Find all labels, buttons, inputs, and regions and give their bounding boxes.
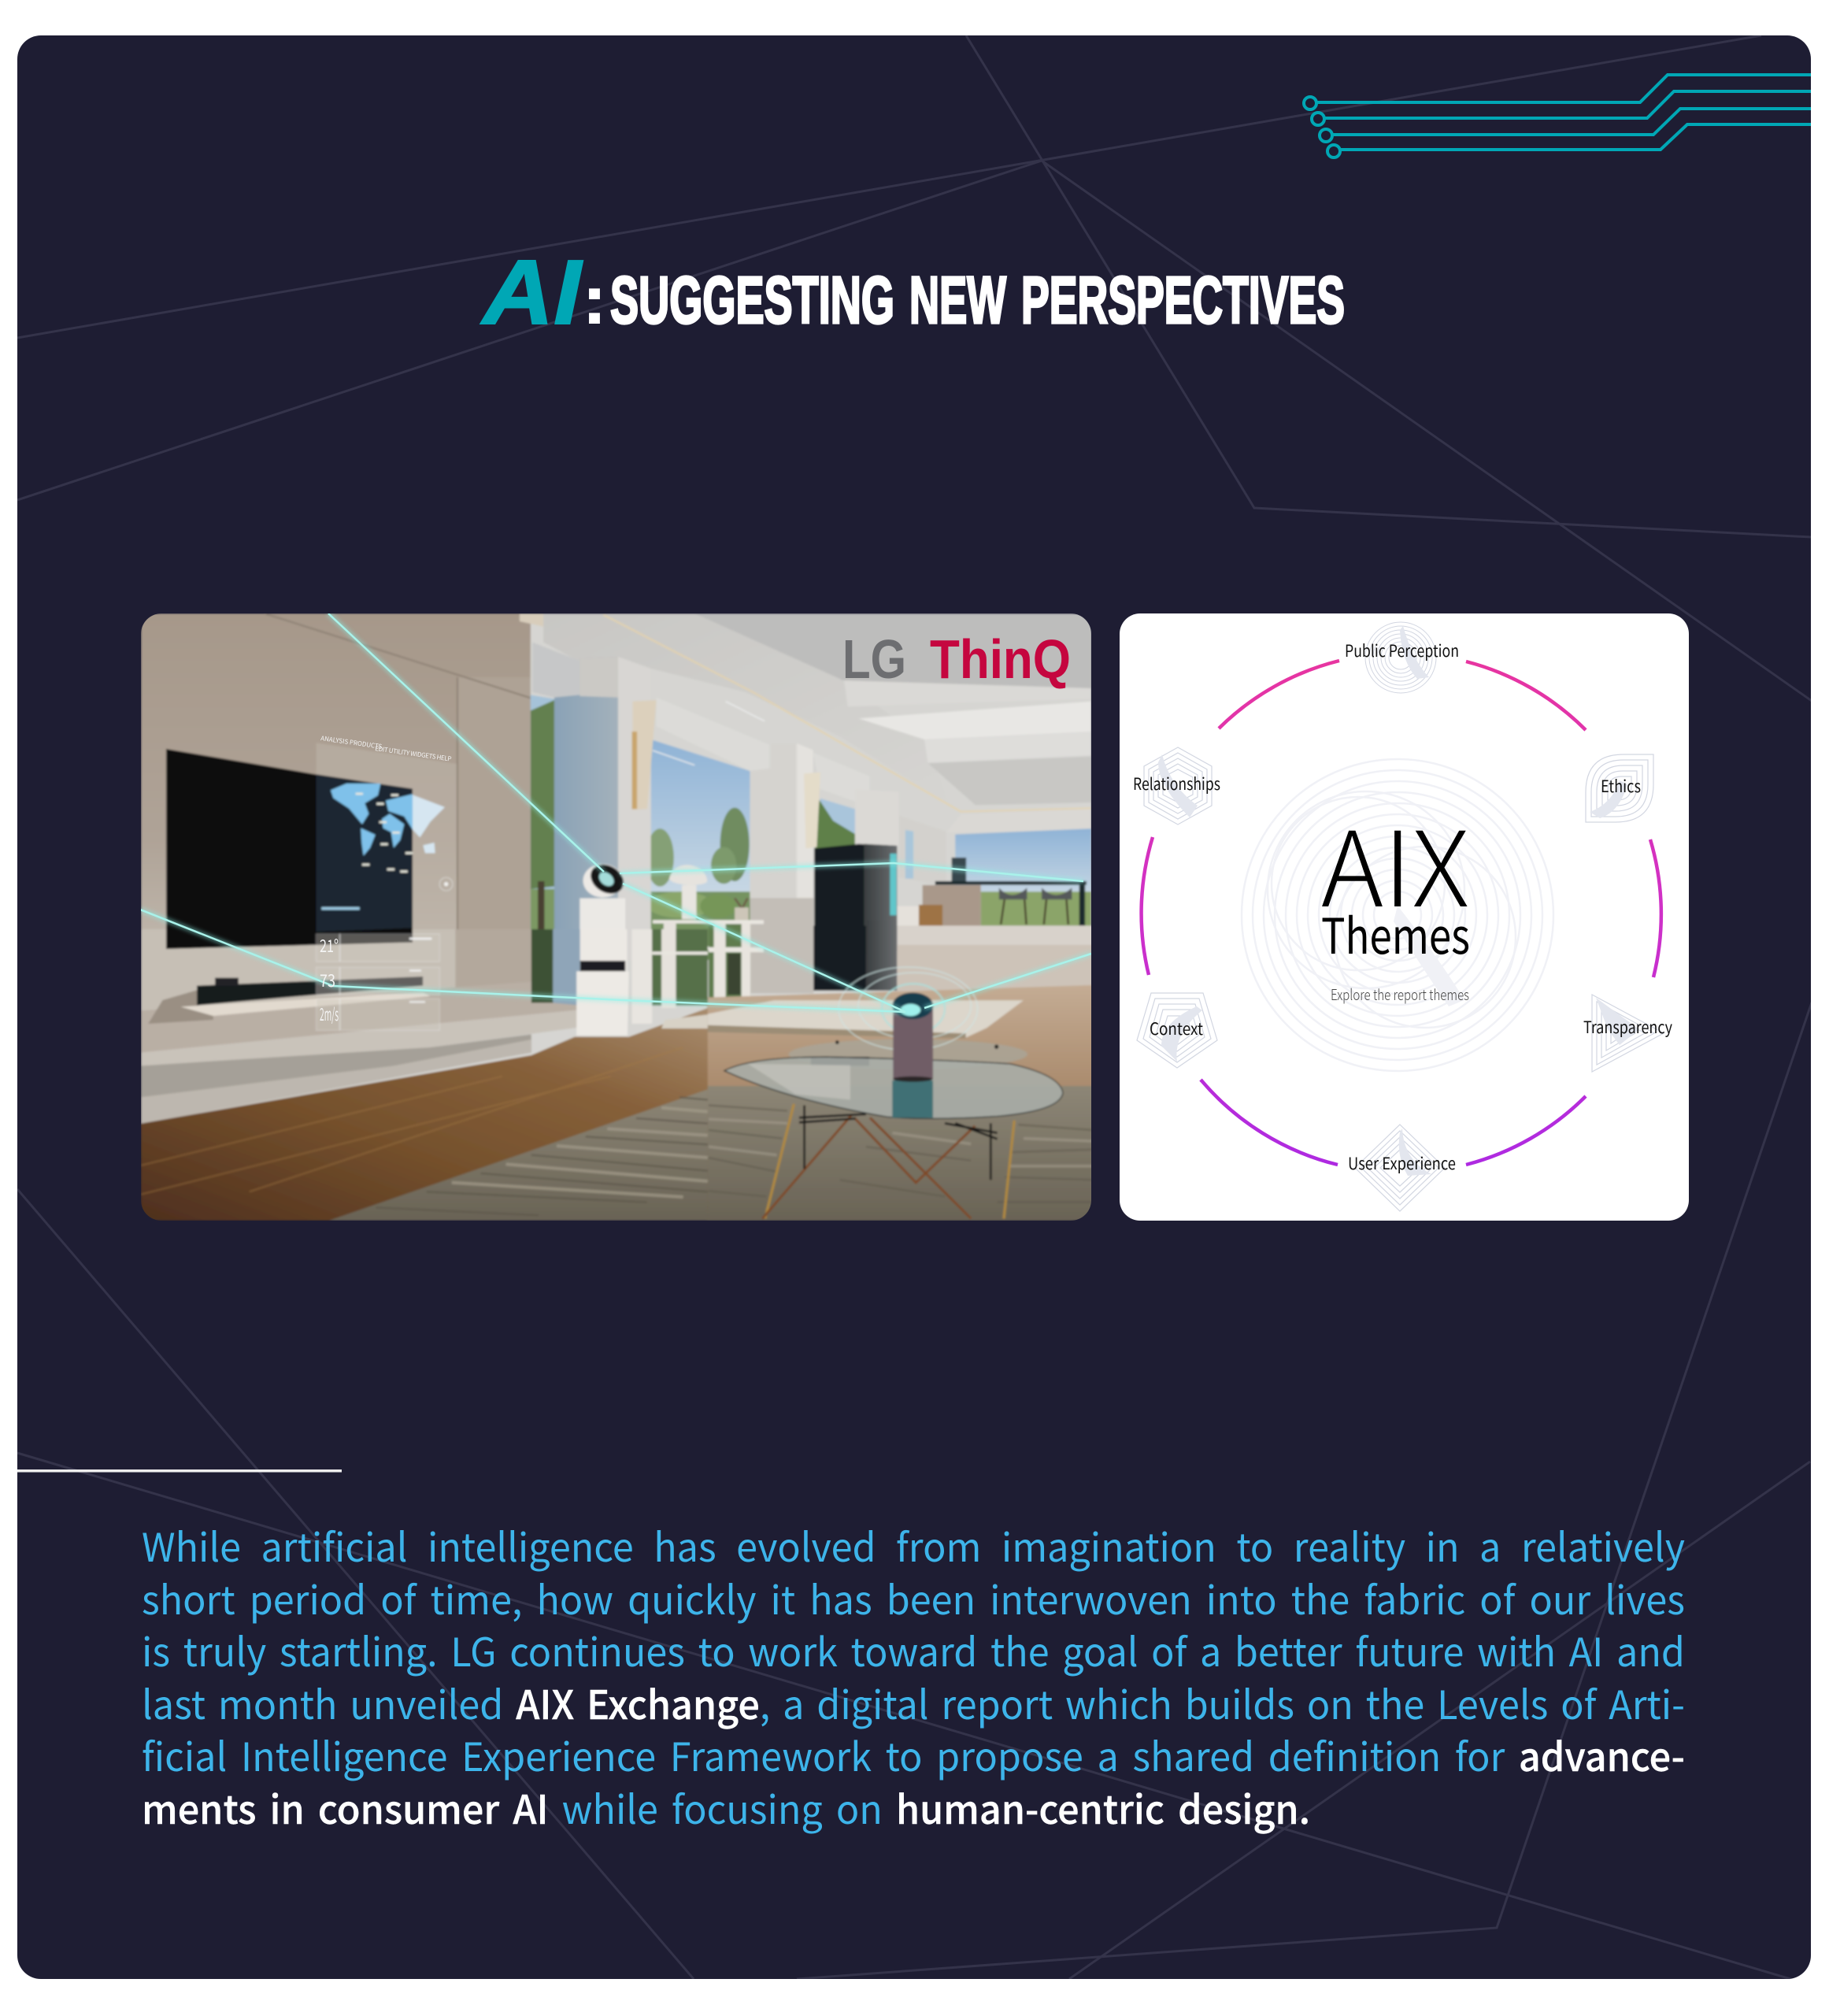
theme labels: Relationships — [1133, 772, 1220, 795]
photo: wall display readouts: 2m/s — [320, 1001, 339, 1026]
ring of arcs — [1142, 661, 1661, 1165]
interior: ceiling, columns and windows — [520, 613, 1092, 960]
icon: context pentagon — [1137, 993, 1217, 1068]
photo: wall display readouts: ANALYSIS PRODUCTS — [320, 734, 383, 751]
logo: LG ThinQ — [846, 638, 1069, 688]
icon: public perception circle — [1365, 622, 1436, 693]
icon: transparency triangle — [1592, 995, 1664, 1072]
photo: wall display readouts: 73 — [320, 967, 335, 992]
concentric rings — [1242, 759, 1553, 1071]
title: AI — [480, 241, 583, 343]
interior: left wall — [141, 613, 532, 931]
title: SUGGESTING — [610, 263, 894, 337]
body paragraph — [142, 1517, 1685, 1836]
body paragraph: While artificial intelligence has evolved from imagination to reality in a relatively — [142, 1517, 1685, 1573]
theme labels: User Experience — [1348, 1151, 1456, 1175]
title — [480, 241, 1345, 343]
theme labels: Public Perception — [1345, 639, 1459, 662]
title: PERSPECTIVES — [1021, 263, 1345, 337]
logo: LG ThinQ: ThinQ — [930, 628, 1071, 690]
photo: wall display readouts — [320, 734, 452, 1026]
icon: ethics leaf — [1586, 754, 1653, 822]
theme labels: Transparency — [1583, 1015, 1672, 1039]
interior: TV and holographic map — [166, 743, 457, 1030]
body paragraph: ficial Intelligence Experience Framework to propose a shared definition for advance- — [142, 1726, 1685, 1783]
body paragraph: is truly startling. LG continues to work toward the goal of a better future with AI and — [142, 1621, 1685, 1678]
heading: Themes: Themes — [1321, 897, 1470, 968]
theme labels — [1133, 639, 1672, 1175]
body paragraph: ments in consumer AI while focusing on human-centric design. — [142, 1779, 1310, 1836]
interior: right lower room and coffee table — [707, 898, 1094, 1221]
icon: relationships hexagon — [1144, 747, 1212, 825]
title: NEW — [909, 263, 1006, 337]
interior: console, floor and rug on the left — [141, 929, 708, 1221]
photo: wall display readouts: 21° — [320, 932, 339, 958]
caption: explore the report themes: Explore the report themes — [1331, 984, 1469, 1005]
photo: LG ThinQ smart living room — [140, 613, 1094, 1221]
panel: AIX Themes diagram — [1120, 613, 1689, 1221]
icon: circuit traces — [1304, 75, 1811, 158]
body paragraph: short period of time, how quickly it has been interwoven into the fabric of our lives — [142, 1569, 1685, 1626]
theme labels: Ethics — [1601, 774, 1641, 798]
photo: wall display readouts: EDIT UTILITY WIDGETS HELP — [375, 744, 452, 764]
logo: LG ThinQ: LG — [842, 628, 906, 690]
heading: AIX: AIX — [1321, 787, 1469, 937]
icon: user experience diamond — [1355, 1125, 1445, 1211]
light beams — [140, 613, 1091, 1012]
divider rule — [17, 1469, 342, 1473]
title: : — [583, 263, 605, 337]
theme labels: Context — [1150, 1017, 1203, 1040]
body paragraph: last month unveiled AIX Exchange, a digital report which builds on the Levels of Arti- — [142, 1674, 1685, 1731]
